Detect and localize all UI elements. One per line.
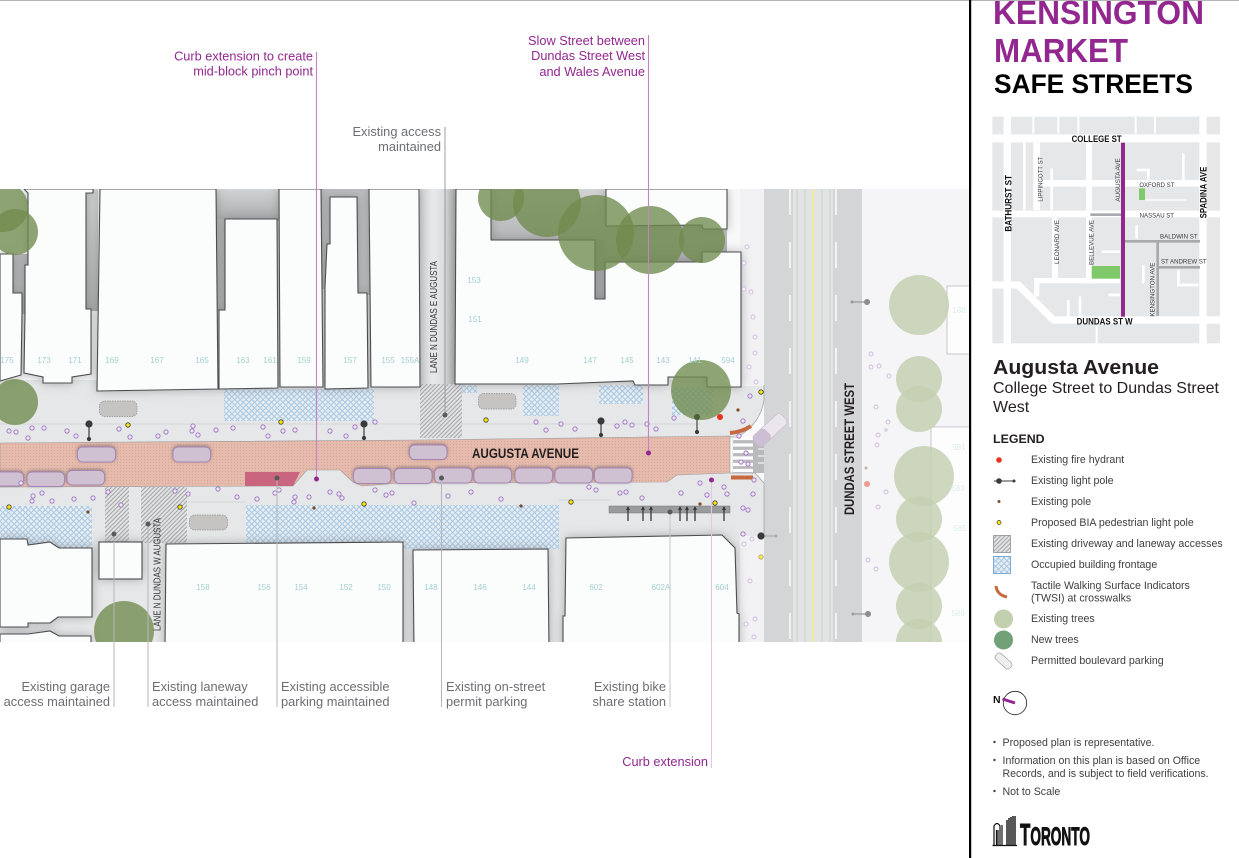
- legend: occupied frontage: Occupied building frontage: [1031, 559, 1157, 571]
- callout: laneway access: Existing laneway: [152, 679, 248, 694]
- building address numbers: 158: [196, 583, 210, 592]
- building address numbers: 155: [381, 356, 395, 365]
- street label: east laneway: LANE N DUNDAS E AUGUSTA: [429, 261, 440, 373]
- plan notes: Information on this plan is based on Office: [1002, 755, 1200, 767]
- key map street names: [1004, 134, 1209, 326]
- crosswalk at Dundas: [732, 437, 764, 473]
- boulevard parked cars: [100, 394, 516, 530]
- building address numbers: 151: [468, 315, 482, 324]
- plan notes: [993, 737, 1209, 798]
- building address numbers: 602: [589, 583, 603, 592]
- building address numbers: 175: [0, 356, 14, 365]
- callout: curb extension mid-block: [174, 48, 319, 482]
- callout: on-street parking: [439, 476, 546, 709]
- occupied building frontage hatching: [0, 385, 713, 549]
- callout: on-street parking: permit parking: [446, 694, 527, 709]
- building address numbers: 150: [377, 583, 391, 592]
- key map street names: ST ANDREW ST: [1161, 258, 1207, 265]
- building address numbers: 188: [952, 306, 966, 315]
- sidewalk joint lines: [0, 424, 700, 502]
- callout: garage access: Existing garage: [21, 679, 110, 694]
- key map street names: DUNDAS ST W: [1077, 316, 1133, 326]
- pedestrians on lighter sidewalks: [742, 245, 891, 639]
- legend: driveway accesses: [994, 536, 1223, 552]
- subtitle: Augusta Avenue: [993, 357, 1159, 379]
- key map street names: COLLEGE ST: [1072, 134, 1122, 144]
- key map local streets: [1090, 215, 1200, 316]
- callout: garage access: [4, 532, 116, 709]
- building address numbers: 149: [515, 356, 529, 365]
- callout: bike share: [592, 510, 672, 709]
- callout: slow street: Dundas Street West: [531, 48, 645, 63]
- tactile walking surface indicators: [730, 426, 753, 478]
- legend: new trees: [994, 630, 1079, 650]
- subtitle: College Street to Dundas Street: [993, 380, 1220, 397]
- building address numbers: 141: [688, 356, 702, 365]
- building address numbers: 581: [952, 443, 966, 452]
- legend: driveway accesses: Existing driveway and laneway accesses: [1031, 538, 1223, 550]
- callout: curb extension mid-block: Curb extension to create: [174, 48, 313, 64]
- building address numbers: 148: [424, 583, 438, 592]
- callout: accessible parking: [274, 476, 390, 709]
- legend: existing trees: Existing trees: [1031, 613, 1095, 625]
- key map street names: OXFORD ST: [1139, 182, 1174, 189]
- building address numbers: 583: [951, 484, 965, 493]
- existing poles: [86, 408, 867, 514]
- callout: existing access: Existing access: [352, 124, 441, 139]
- key map street names: BALDWIN ST: [1160, 233, 1198, 240]
- key map road network: [992, 117, 1220, 343]
- east sidewalk of Dundas: [862, 189, 970, 642]
- building address numbers: 147: [583, 356, 597, 365]
- bike share station: [609, 506, 730, 521]
- on-street permit parking: [0, 445, 632, 486]
- building address numbers: 145: [620, 356, 634, 365]
- building address numbers: 153: [467, 276, 481, 285]
- building address numbers: 602A: [652, 583, 671, 592]
- proposed BIA pedestrian light poles: [7, 390, 763, 559]
- callout: accessible parking: Existing accessible: [281, 679, 390, 694]
- building address numbers: 604: [715, 583, 729, 592]
- legend: occupied frontage: [994, 556, 1157, 574]
- building address numbers: 173: [37, 356, 51, 365]
- street label: Augusta Avenue: AUGUSTA AVENUE: [472, 446, 579, 461]
- building address numbers: 144: [522, 583, 536, 592]
- existing light poles: [86, 299, 871, 617]
- existing trees east: [889, 275, 954, 665]
- north arrow: N: [993, 694, 1001, 706]
- callout: laneway access: access maintained: [152, 694, 258, 709]
- building address numbers: 159: [297, 356, 311, 365]
- legend: boulevard parking: Permitted boulevard parking: [1031, 655, 1164, 667]
- south side buildings: [0, 535, 739, 650]
- key map street names: LEONARD AVE: [1054, 220, 1061, 264]
- building address numbers: 146: [473, 583, 487, 592]
- building address numbers: 156: [257, 583, 271, 592]
- plan notes: Records, and is subject to field verifications.: [1002, 768, 1209, 780]
- building address numbers: 163: [236, 356, 250, 365]
- building address numbers: 171: [68, 356, 82, 365]
- Dundas Street West roadway: [764, 189, 862, 642]
- building address numbers: 155A: [401, 356, 420, 365]
- existing fire hydrants: [717, 414, 870, 487]
- callout: curb extension corner: Curb extension: [622, 754, 708, 769]
- plan notes: Proposed plan is representative.: [1002, 737, 1154, 749]
- legend: existing trees: [994, 610, 1095, 628]
- legend: light pole: Existing light pole: [1031, 475, 1114, 487]
- rear courtyards and gaps: [13, 189, 727, 385]
- key map parks: [1092, 188, 1145, 279]
- Augusta Avenue pavers slow street: [0, 436, 730, 487]
- key map street names: AUGUSTA AVE: [1115, 158, 1122, 202]
- sidewalk surface: [0, 380, 764, 642]
- building address numbers: 143: [656, 356, 670, 365]
- accessible parking stall: [245, 472, 300, 486]
- callout: curb extension mid-block: mid-block pinch point: [193, 64, 313, 78]
- new and mature trees: [0, 169, 731, 661]
- title: [993, 0, 1204, 99]
- east side buildings on Dundas: [930, 286, 969, 642]
- callout: slow street: Slow Street between: [528, 33, 645, 48]
- building address numbers: 165: [195, 356, 209, 365]
- Toronto logo: [992, 816, 1090, 852]
- key map: [992, 117, 1220, 343]
- building address numbers: 152: [339, 583, 353, 592]
- callout: slow street: and Wales Avenue: [539, 64, 645, 79]
- key map street names: NASSAU ST: [1140, 213, 1174, 220]
- legend: TWSI: Tactile Walking Surface Indicators: [1031, 580, 1190, 592]
- callout: bike share: Existing bike: [594, 679, 666, 694]
- north side buildings: [0, 189, 741, 391]
- street label: west laneway: LANE N DUNDAS W AUGUSTA: [152, 518, 164, 631]
- north arrow: [993, 691, 1027, 715]
- callout: existing access: [352, 124, 448, 418]
- legend: new trees: New trees: [1031, 634, 1079, 646]
- building address numbers: [0, 276, 967, 618]
- legend: light pole: [994, 475, 1114, 487]
- callout: on-street parking: Existing on-street: [446, 679, 546, 694]
- building address numbers: 157: [343, 356, 357, 365]
- key map Augusta Avenue highlight: [1121, 143, 1125, 317]
- building address numbers: 169: [105, 356, 119, 365]
- legend: pole: [998, 496, 1091, 508]
- pedestrians: [7, 394, 756, 536]
- key map street names: BATHURST ST: [1004, 175, 1014, 232]
- building address numbers: 589: [951, 609, 965, 618]
- street label: Dundas Street West: DUNDAS STREET WEST: [841, 383, 857, 515]
- legend: boulevard parking: [994, 652, 1164, 670]
- legend: pole: Existing pole: [1031, 496, 1091, 508]
- callout: accessible parking: parking maintained: [281, 694, 390, 709]
- curb line at corner: [730, 385, 764, 536]
- key map street names: BELLEVUE AVE: [1088, 220, 1095, 265]
- title: MARKET: [994, 33, 1128, 70]
- legend: [993, 432, 1223, 670]
- legend: TWSI: [996, 580, 1190, 604]
- boulevard parking at the corner: [752, 413, 788, 447]
- callout: slow street: [528, 33, 651, 456]
- building address numbers: 154: [294, 583, 308, 592]
- street plan map: [0, 169, 977, 665]
- callout: curb extension corner: [622, 478, 714, 769]
- plan notes: Not to Scale: [1002, 786, 1060, 798]
- legend: TWSI: (TWSI) at crosswalks: [1031, 592, 1131, 604]
- key map street names: LIPPINCOTT ST: [1037, 157, 1044, 202]
- legend heading: LEGEND: [993, 432, 1045, 446]
- key map street names: KENSINGTON AVE: [1149, 263, 1156, 317]
- Toronto logo: TORONTO: [1020, 817, 1090, 852]
- driveway and laneway hatching: [105, 384, 462, 543]
- legend: fire hydrant: Existing fire hydrant: [1031, 454, 1124, 466]
- callout: laneway access: [146, 522, 258, 709]
- building address numbers: 161: [263, 356, 277, 365]
- callout: garage access: access maintained: [4, 694, 110, 709]
- logo skyline mark: [992, 816, 1017, 846]
- legend: BIA light pole: Proposed BIA pedestrian light pole: [1031, 517, 1194, 529]
- building address numbers: 167: [150, 356, 164, 365]
- building address numbers: 594: [721, 356, 735, 365]
- callout: existing access: maintained: [378, 139, 441, 154]
- subtitle: West: [993, 399, 1030, 416]
- callout: bike share: share station: [592, 694, 666, 709]
- subtitle: [993, 357, 1220, 416]
- building address numbers: 585: [953, 524, 967, 533]
- key map street names: SPADINA AVE: [1199, 167, 1209, 218]
- title: SAFE STREETS: [994, 69, 1193, 99]
- sidebar divider: [969, 0, 971, 858]
